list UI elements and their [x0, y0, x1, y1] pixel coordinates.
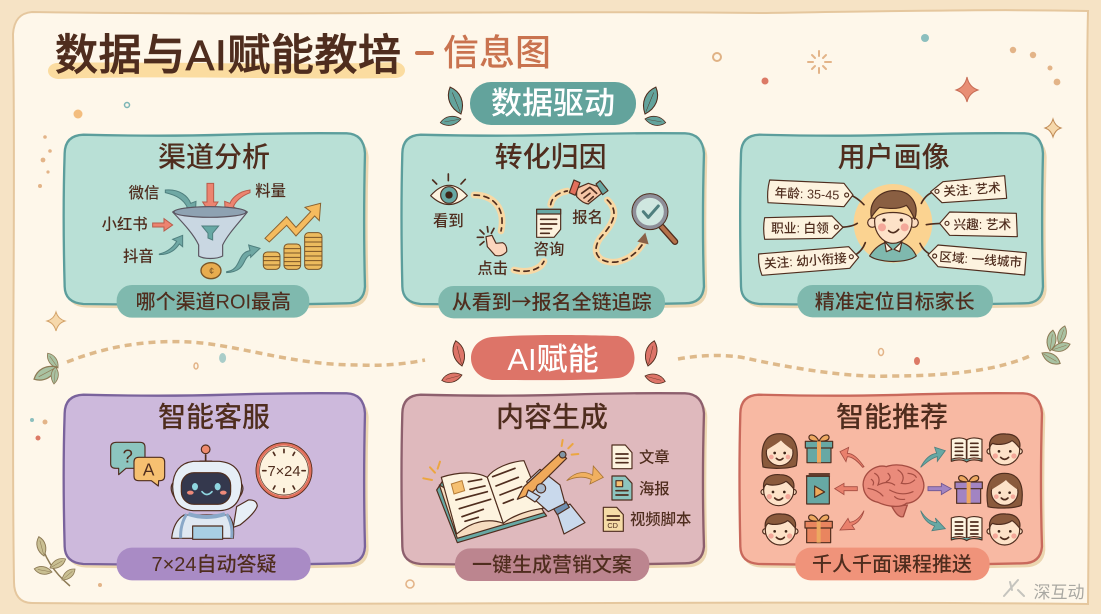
dashed divider left	[67, 342, 425, 365]
panel: 渠道分析	[64, 133, 369, 318]
result arrow	[227, 245, 260, 273]
heading: 内容生成	[496, 402, 608, 433]
dashed journey path	[474, 191, 649, 271]
output: 海报	[612, 476, 670, 500]
botanical sprig right	[1040, 325, 1071, 367]
avatar	[854, 184, 932, 263]
icon: eye: 看到	[433, 213, 464, 230]
output: 视频脚本: CD	[607, 521, 618, 530]
caption pill: 千人千面课程推送	[812, 553, 972, 576]
channel labels	[102, 183, 286, 265]
tag: 关注幼小衔接: 关注: 幼小衔接	[763, 250, 848, 271]
clock: 7×24	[267, 464, 300, 480]
title highlight	[48, 62, 405, 79]
icon: brain	[863, 465, 924, 517]
tag: 关注艺术	[921, 176, 1007, 203]
heading: 用户画像	[838, 142, 950, 173]
chat bubbles: ?	[122, 446, 133, 467]
panel: 智能推荐	[739, 393, 1045, 580]
heading: 智能推荐	[836, 402, 948, 433]
clock	[256, 443, 312, 499]
chat bubbles	[111, 442, 165, 486]
caption pill	[117, 285, 309, 318]
output: 文章	[612, 445, 670, 469]
right items	[951, 438, 982, 541]
icon: handshake	[569, 180, 608, 227]
icon: eye	[431, 174, 467, 230]
output: 视频脚本: 视频脚本	[630, 512, 691, 529]
heading: 智能客服	[158, 402, 270, 433]
dashed divider right	[678, 355, 1032, 376]
caption pill	[795, 548, 990, 580]
coin: ¢	[209, 266, 214, 276]
arrow to outputs	[567, 466, 603, 484]
channel labels: 抖音	[123, 248, 154, 265]
channel labels: 微信	[129, 185, 159, 202]
tag: 职业	[764, 216, 857, 239]
icon: magnifier	[632, 194, 675, 242]
tag: 区域: 区域: 一线城市	[939, 249, 1023, 270]
panel: 内容生成	[401, 393, 707, 581]
chat bubbles: A	[143, 459, 155, 479]
panel: 用户画像	[740, 133, 1047, 317]
growth arrow	[265, 203, 321, 242]
caption pill: 7×24自动答疑	[152, 553, 276, 576]
tag: 关注幼小衔接	[759, 243, 865, 275]
section pill: 数据驱动: 数据驱动	[491, 86, 615, 121]
tag: 关注艺术: 关注: 艺术	[943, 180, 1002, 199]
output: 视频脚本	[603, 507, 691, 531]
tag: 兴趣艺术: 兴趣: 艺术	[953, 218, 1011, 232]
right users	[987, 434, 1022, 545]
caption pill: 一键生成营销文案	[472, 554, 632, 577]
tag: 年龄	[768, 180, 864, 207]
caption pill: 从看到→报名全链追踪	[452, 286, 652, 315]
title: 数据与AI赋能教培	[55, 32, 401, 80]
watermark	[1004, 580, 1084, 602]
coin	[201, 263, 221, 279]
channel labels: 小红书	[102, 217, 148, 234]
tag: 区域	[920, 243, 1026, 275]
caption pill: 哪个渠道ROI最高	[136, 290, 291, 313]
funnel	[173, 207, 247, 258]
tag: 兴趣艺术	[926, 212, 1017, 237]
heading: 渠道分析	[158, 142, 270, 173]
panel: 转化归因	[401, 133, 707, 318]
left items	[805, 435, 833, 543]
watermark: 深互动	[1034, 583, 1084, 602]
botanical sprig bottom left	[34, 536, 77, 586]
caption pill	[117, 548, 311, 580]
left users	[761, 434, 798, 545]
caption pill: 精准定位目标家长	[815, 290, 975, 313]
caption pill	[797, 285, 993, 317]
section pill: AI赋能	[471, 335, 634, 380]
leaves: AI赋能	[441, 339, 666, 386]
coin stacks	[263, 233, 322, 269]
subtitle: 信息图	[443, 32, 551, 73]
icon: open book	[437, 461, 547, 543]
channel labels: 料量	[255, 183, 286, 200]
output: 海报: 海报	[639, 481, 670, 498]
heading: 转化归因	[495, 142, 607, 173]
icon: robot hand with pen	[423, 440, 585, 534]
section pill: AI赋能: AI赋能	[507, 342, 599, 377]
tag: 年龄: 年龄: 35-45	[774, 186, 840, 202]
output: 文章: 文章	[639, 449, 670, 467]
icon: document	[534, 209, 564, 258]
icon: click hand	[477, 227, 508, 278]
tag: 职业: 职业: 白领	[771, 221, 829, 236]
panel: 智能客服	[64, 393, 369, 580]
robot	[171, 445, 257, 539]
section pill: 数据驱动	[470, 82, 636, 125]
botanical sprig left	[31, 351, 61, 384]
arrows from brain	[835, 447, 951, 531]
leaves: 数据驱动	[440, 85, 666, 127]
arrows into funnel	[153, 183, 250, 255]
icon: handshake: 报名	[572, 210, 603, 227]
icon: document: 咨询	[534, 241, 564, 258]
caption pill	[455, 548, 649, 581]
icon: click hand: 点击	[477, 261, 508, 278]
